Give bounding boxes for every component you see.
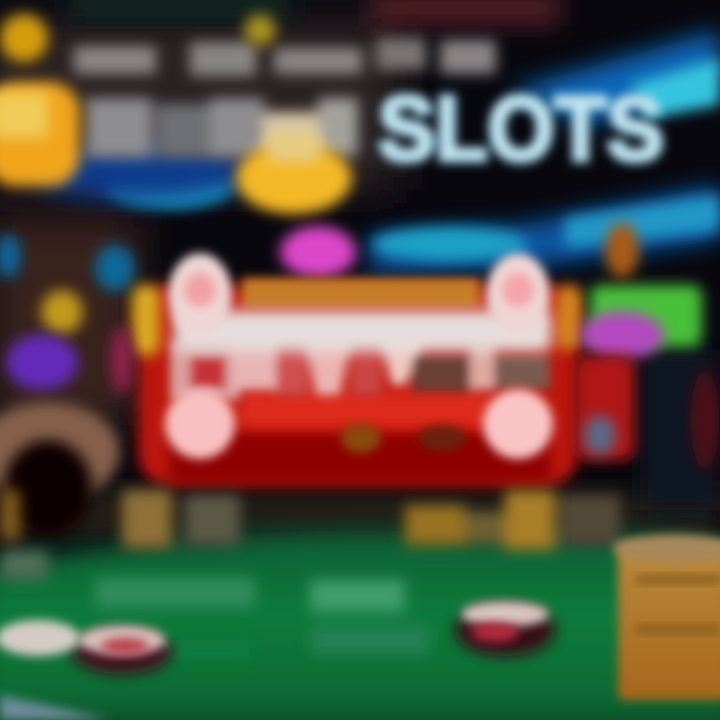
coin piles — [0, 490, 620, 580]
arch doorway — [0, 402, 120, 536]
slot machine — [132, 253, 582, 485]
reel columns — [170, 335, 550, 400]
icon: pink topper — [280, 226, 356, 278]
title: blurred second line word — [86, 98, 358, 158]
neighbouring machine right — [575, 222, 719, 470]
icon: gold crown centre — [236, 14, 352, 214]
buttons — [341, 423, 381, 453]
background: blue neon streaks — [0, 30, 720, 291]
table markings — [95, 578, 430, 660]
icon: gold crown left — [0, 14, 80, 186]
machine body — [138, 285, 578, 485]
title: top line placeholder bars — [74, 38, 496, 76]
neighbouring machine left — [6, 290, 134, 394]
marquee — [242, 278, 480, 308]
poker chips — [0, 601, 555, 674]
title: SLOTS: SLOTS — [378, 78, 664, 180]
title: SLOTS: SLOTS — [378, 78, 664, 180]
side trim — [132, 285, 160, 355]
white reel band — [174, 310, 552, 352]
green felt table — [0, 530, 720, 720]
top lights — [168, 253, 232, 337]
bottom lights — [165, 389, 235, 459]
coin stack right — [613, 534, 720, 700]
bottom-left table edge — [0, 695, 110, 720]
